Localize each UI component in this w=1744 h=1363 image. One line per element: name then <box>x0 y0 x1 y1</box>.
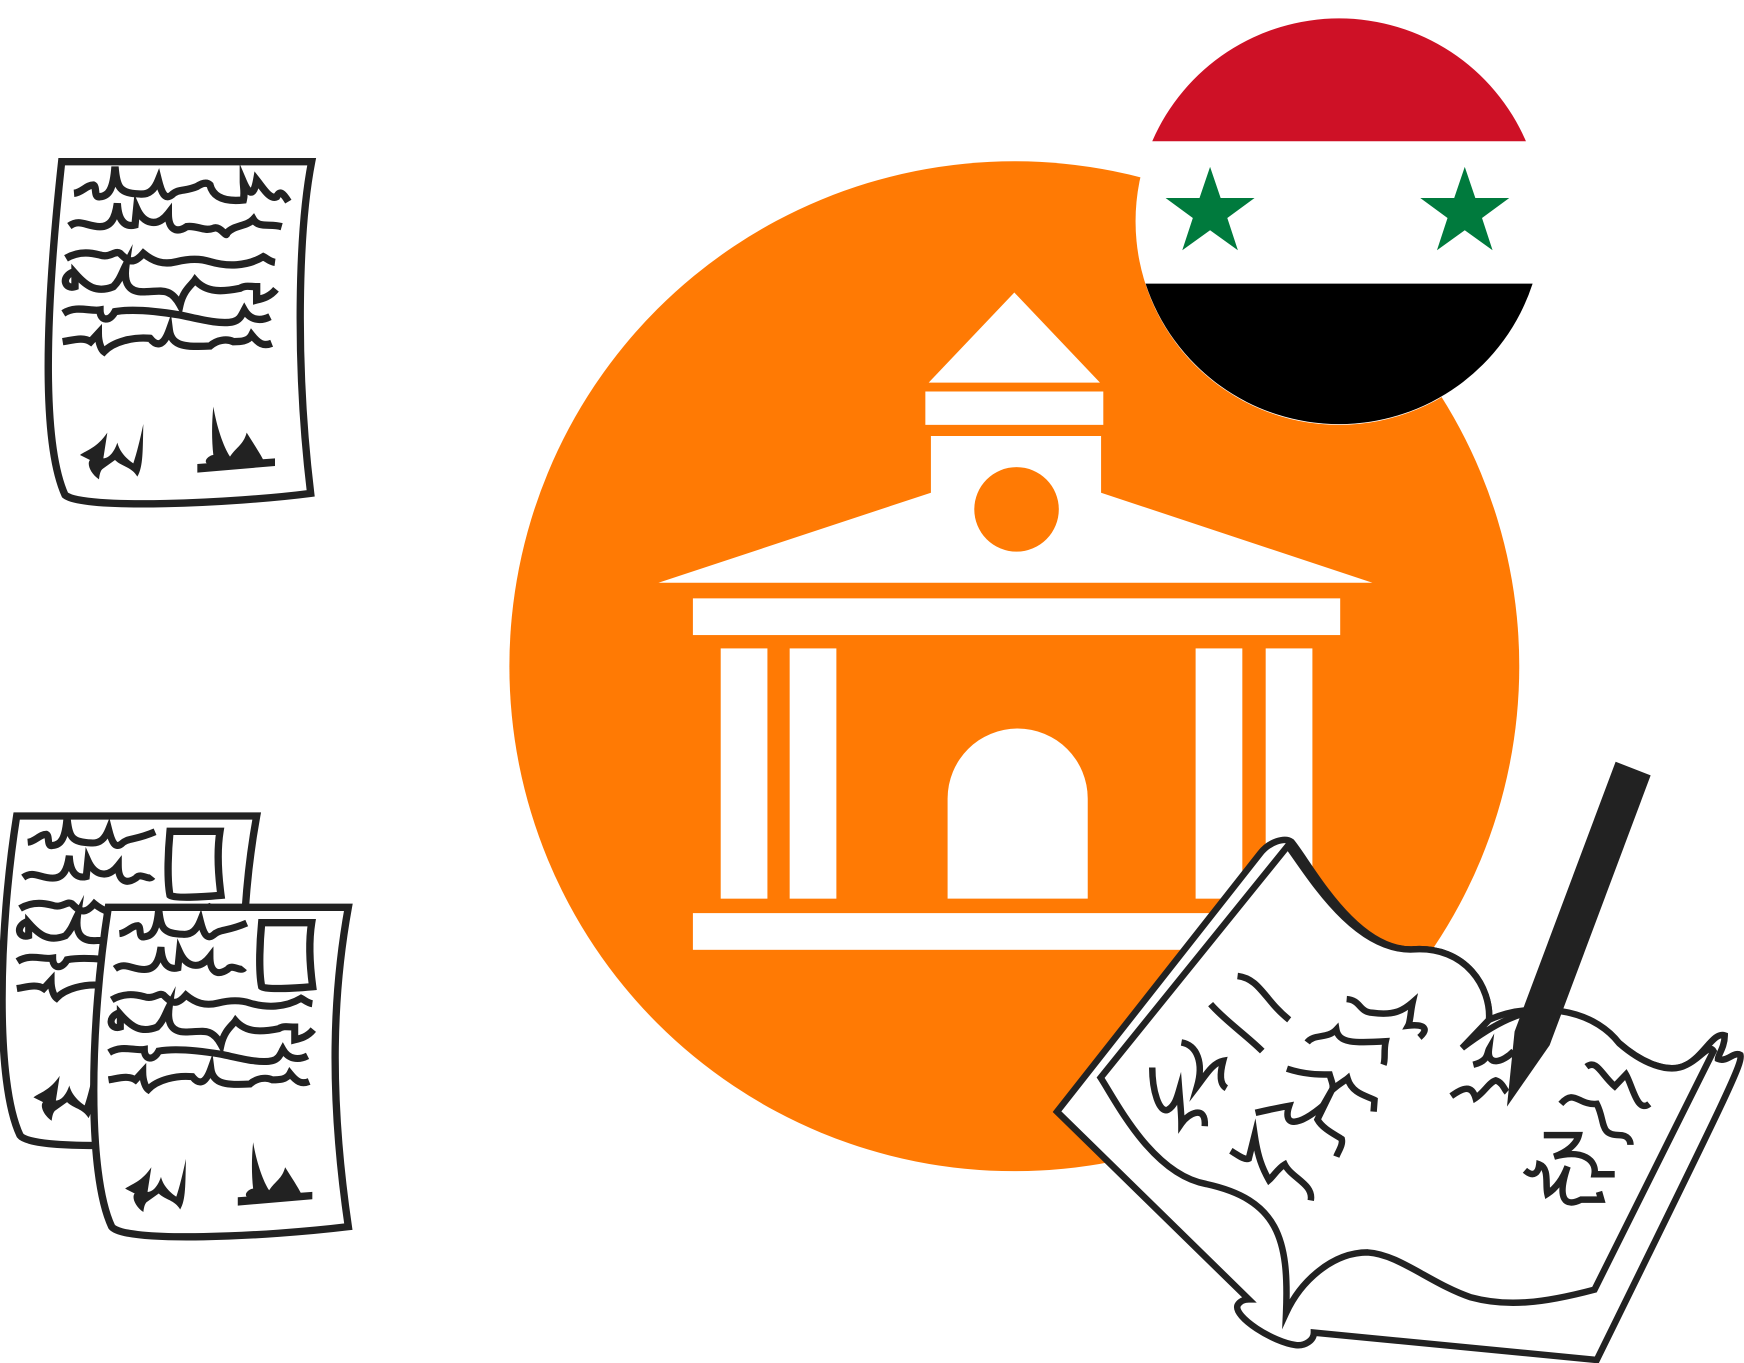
orange circle <box>509 161 1519 1171</box>
icon: open book with pen <box>1057 762 1741 1360</box>
handwriting scribbles <box>1152 976 1649 1202</box>
icon: stacked documents <box>2 816 348 1237</box>
icon: government building <box>658 293 1372 950</box>
icon: single document <box>48 162 312 504</box>
back document <box>2 816 257 1145</box>
front document <box>94 907 348 1237</box>
book cover <box>1057 840 1741 1360</box>
icon: Syrian flag circle <box>1136 18 1543 425</box>
pen <box>1507 762 1651 1107</box>
orange circle with building <box>509 161 1519 1171</box>
book pages <box>1101 846 1714 1313</box>
